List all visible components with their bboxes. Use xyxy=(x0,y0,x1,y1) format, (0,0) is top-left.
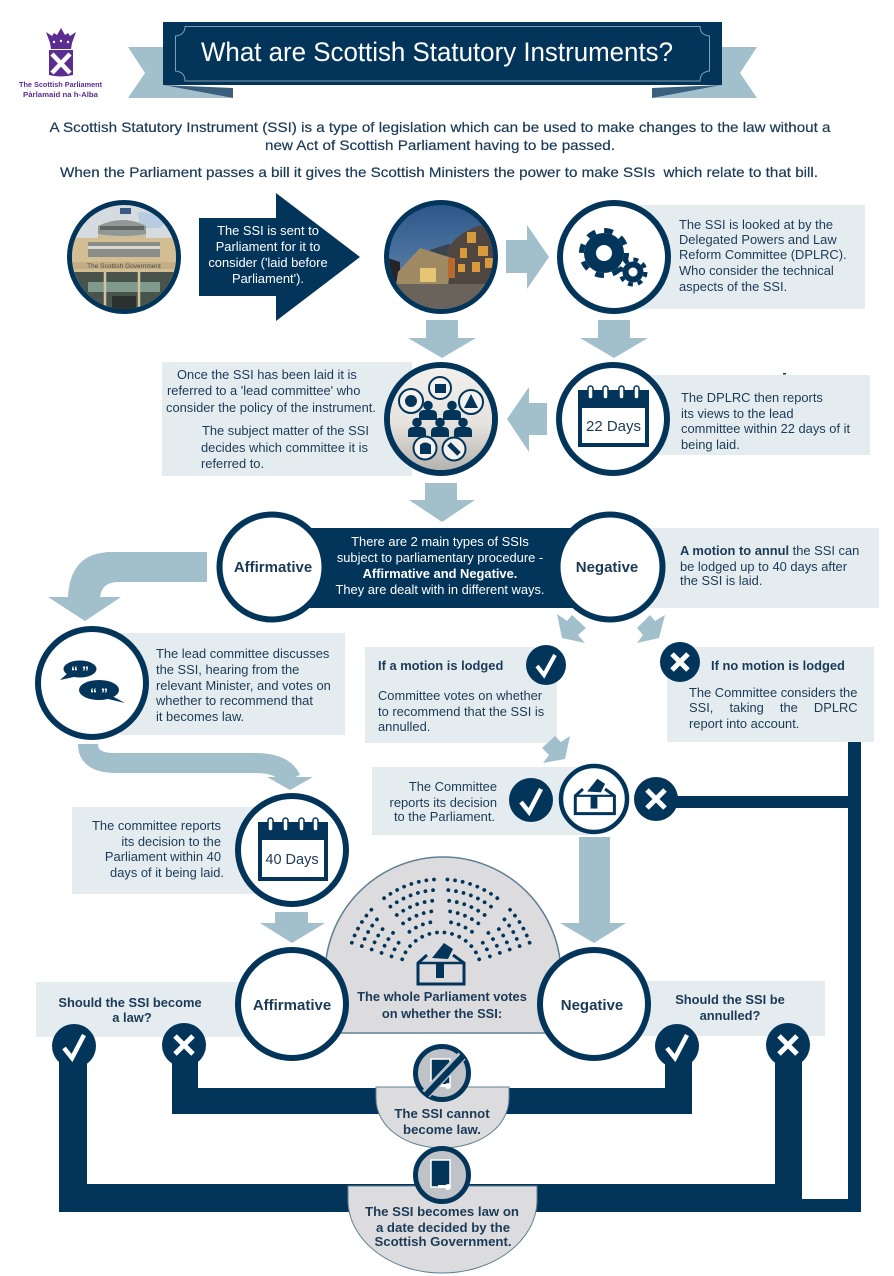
dark route: cannot become law lines xyxy=(172,1060,692,1114)
panel: lead committee discusses: The lead committee discusses xyxy=(156,646,329,661)
panel: lead committee: referred to a 'lead committee' who xyxy=(167,383,360,398)
logo: Scottish Parliament: Pàrlamaid na h-Alba xyxy=(23,90,99,99)
icon circle: committee members xyxy=(387,365,495,473)
arrow: down from Parliament xyxy=(408,320,476,358)
panel: DPLRC technical check: Delegated Powers and Law xyxy=(679,232,837,247)
panel: lead committee: referred to. xyxy=(201,456,264,471)
icon circle: 22 days calendar: 22 Days xyxy=(586,418,641,435)
panel: if a motion is lodged: Committee votes on whether xyxy=(378,688,543,703)
panel: SSI cannot become law: become law. xyxy=(403,1122,481,1137)
panel: if no motion is lodged xyxy=(667,647,874,742)
panel: lead committee discusses xyxy=(120,633,345,735)
arrow: DPLRC report to lead committee xyxy=(507,387,547,452)
arrow: to whole Parliament negative xyxy=(560,837,626,943)
panel: if a motion is lodged xyxy=(365,647,557,743)
panel: DPLRC technical check: Who consider the technical xyxy=(679,263,834,278)
panel: SSI becomes law xyxy=(348,1186,537,1273)
panel: if no motion is lodged: SSI, taking the DPLRC xyxy=(689,700,858,715)
panel: if no motion is lodged: The Committee considers the xyxy=(689,685,857,700)
circle: Negative: Negative xyxy=(576,559,638,576)
panel: lead committee: consider the policy of the instrument. xyxy=(166,400,376,415)
arrow: to whole Parliament affirmative xyxy=(260,912,325,943)
panel: lead committee: The subject matter of the SSI xyxy=(202,423,369,438)
icon: tick for motion lodged xyxy=(526,645,566,685)
panel: negative motion to annul xyxy=(640,528,879,608)
circle: Negative vote xyxy=(540,950,648,1058)
panel: negative motion to annul: be lodged up to 40 days after xyxy=(680,559,848,574)
panel: should the SSI become a law: a law? xyxy=(112,1010,152,1025)
panel: committee reports decision: to the Parliament. xyxy=(394,809,495,824)
intro text: A Scottish Statutory Instrument (SSI) is a type of legislation which can be used to make changes to the law without a xyxy=(50,120,831,135)
icon: crossed-out document xyxy=(416,1046,468,1100)
icon: annul yes xyxy=(655,1024,699,1068)
arrow: laid before Parliament xyxy=(199,193,360,321)
panel: DPLRC report: committee within 22 days of it xyxy=(681,421,851,436)
panel: if no motion is lodged: If no motion is lodged xyxy=(711,658,845,673)
panel: lead committee: decides which committee it is xyxy=(201,440,368,455)
icon circle: gears xyxy=(560,203,668,311)
panel: if a motion is lodged: to recommend that the SSI is xyxy=(378,704,544,719)
photo circle: government building: The Scottish Government xyxy=(87,263,161,270)
panel: SSI cannot become law: The SSI cannot xyxy=(394,1106,490,1121)
panel: if a motion is lodged: If a motion is lodged xyxy=(378,658,503,673)
panel: SSI becomes law: a date decided by the xyxy=(376,1220,510,1235)
logo: Scottish Parliament xyxy=(19,28,102,99)
logo: Scottish Parliament: The Scottish Parliament xyxy=(19,80,102,89)
icon circle: discussion: “ ” xyxy=(71,663,89,679)
arrow: laid before Parliament: consider ('laid before xyxy=(208,255,328,270)
icon: committee tick xyxy=(509,778,553,822)
arrow: negative to motion lodged xyxy=(557,614,586,643)
panel: lead committee: Once the SSI has been laid it is xyxy=(177,367,357,382)
icon circle: 22 days calendar xyxy=(559,365,667,473)
panel: committee reports decision: The Committee xyxy=(409,779,497,794)
panel: should the SSI become a law xyxy=(36,982,250,1037)
panel: lead committee discusses: it becomes law. xyxy=(156,709,244,724)
icon: become law no xyxy=(162,1023,206,1067)
icon: become law yes xyxy=(52,1024,96,1068)
banner: two main types: There are 2 main types of SSIs xyxy=(351,534,529,549)
circle: Affirmative vote: Affirmative xyxy=(253,997,331,1014)
icon: document xyxy=(416,1148,468,1202)
panel: committee reports within 40 days: Parliament within 40 xyxy=(105,849,221,864)
arrow: motion to committee report xyxy=(542,736,570,763)
panel: should the SSI be annulled xyxy=(640,981,825,1036)
panel: should the SSI become a law: Should the SSI become xyxy=(58,995,202,1010)
panel: SSI cannot become law xyxy=(376,1087,509,1148)
icon circle: discussion: “ ” xyxy=(90,685,108,701)
panel: committee reports decision: reports its decision xyxy=(390,795,497,810)
icon: committee cross xyxy=(634,777,678,821)
dome: whole Parliament votes: The whole Parliament votes xyxy=(357,989,527,1004)
dome: whole Parliament votes: on whether the SSI: xyxy=(382,1006,502,1021)
arrow: laid before Parliament: Parliament'). xyxy=(232,271,304,286)
circle: Negative xyxy=(558,514,662,620)
icon: cross for no motion xyxy=(660,642,700,682)
banner: two main types: Affirmative and Negative. xyxy=(363,566,517,581)
panel: DPLRC technical check xyxy=(640,205,865,309)
panel: should the SSI be annulled: Should the SSI be xyxy=(675,992,785,1007)
panel: lead committee discusses: the SSI, hearing from the xyxy=(156,662,299,677)
icon: annul no xyxy=(766,1023,810,1067)
panel: if a motion is lodged: annulled. xyxy=(378,719,430,734)
title: What are Scottish Statutory Instruments? xyxy=(201,37,673,67)
panel: committee reports within 40 days: days of it being laid. xyxy=(110,865,224,880)
icon circle: discussion xyxy=(38,629,146,737)
arrow: laid before Parliament: The SSI is sent to xyxy=(217,223,319,238)
arrow: to DPLRC xyxy=(506,225,549,289)
photo circle: government building xyxy=(67,200,181,314)
panel: SSI becomes law: Scottish Government. xyxy=(374,1234,512,1249)
photo circle: Scottish Parliament building xyxy=(385,200,500,314)
intro text: new Act of Scottish Parliament having to be passed. xyxy=(265,138,615,153)
intro text xyxy=(50,120,831,180)
circle: Affirmative xyxy=(220,514,324,620)
panel: committee reports within 40 days: its decision to the xyxy=(121,834,221,849)
banner: two main types: subject to parliamentary procedure - xyxy=(337,550,543,565)
panel: DPLRC report xyxy=(640,373,870,455)
panel: should the SSI be annulled: annulled? xyxy=(700,1008,761,1023)
panel: DPLRC technical check: aspects of the SSI. xyxy=(679,279,787,294)
panel: committee reports decision xyxy=(372,767,592,835)
curved arrow: to 40 days xyxy=(88,744,313,790)
circle: Affirmative vote xyxy=(238,950,346,1058)
circle: Affirmative: Affirmative xyxy=(234,559,312,576)
panel: DPLRC technical check: Reform Committee (DPLRC). xyxy=(679,247,847,262)
panel: DPLRC report: being laid. xyxy=(681,437,740,452)
panel: SSI becomes law: The SSI becomes law on xyxy=(365,1204,519,1219)
banner: two main types xyxy=(300,528,590,608)
panel: if no motion is lodged: report into account. xyxy=(689,716,799,731)
arrow: laid before Parliament: Parliament for it to xyxy=(216,239,320,254)
panel: negative motion to annul: A motion to annul the SSI can xyxy=(680,543,859,558)
circle: Negative vote: Negative xyxy=(561,997,623,1014)
panel: negative motion to annul: the SSI is laid. xyxy=(680,573,762,588)
arrow: down from DPLRC xyxy=(580,320,648,358)
panel: DPLRC technical check: The SSI is looked at by the xyxy=(679,217,833,232)
panel: committee reports within 40 days: The committee reports xyxy=(92,818,221,833)
dome: whole Parliament votes xyxy=(325,857,561,1033)
title banner xyxy=(128,22,757,98)
icon: ballot box xyxy=(418,943,464,984)
panel: DPLRC report: its views to the lead xyxy=(681,406,794,421)
panel: lead committee discusses: whether to recommend that xyxy=(155,693,313,708)
curved arrow: to affirmative route xyxy=(48,552,207,621)
icon circle: 40 days calendar xyxy=(238,796,346,904)
panel: lead committee discusses: relevant Minister, and votes on xyxy=(156,678,331,693)
panel: committee reports within 40 days xyxy=(72,807,262,894)
arrow: down to procedure types xyxy=(409,483,475,522)
dark route: no motion line xyxy=(676,742,861,1212)
banner: two main types: They are dealt with in different ways. xyxy=(336,582,544,597)
intro text: When the Parliament passes a bill it gives the Scottish Ministers the power to make SSIs which relate to that bill. xyxy=(60,165,818,180)
dark route: becomes law lines xyxy=(59,1060,802,1212)
chamber seats xyxy=(352,880,530,959)
icon circle: 40 days calendar: 40 Days xyxy=(265,852,319,868)
panel: lead committee xyxy=(162,362,412,476)
icon circle: committee ballot box xyxy=(561,766,627,832)
panel: DPLRC report: The DPLRC then reports xyxy=(681,390,823,405)
arrow: negative to no motion xyxy=(637,615,665,643)
